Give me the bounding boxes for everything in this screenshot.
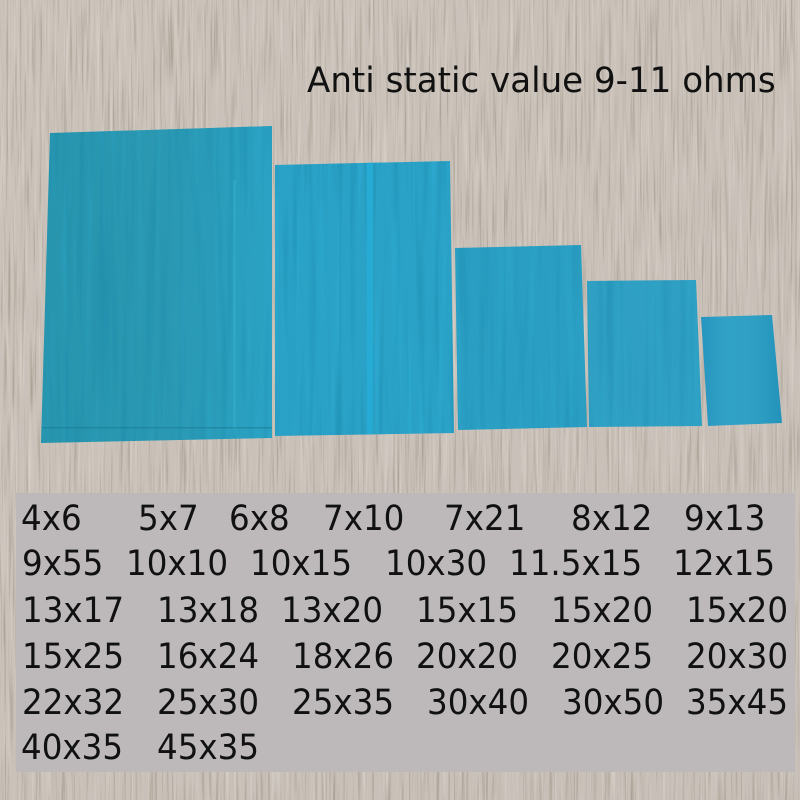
sizes list: 12x15	[673, 544, 775, 584]
sizes list: 9x13	[684, 499, 765, 539]
sizes list: 30x50	[562, 683, 664, 723]
bag 4	[587, 279, 703, 428]
sizes list: 13x17	[22, 591, 124, 631]
sizes list: 15x25	[22, 637, 124, 677]
sizes list: 16x24	[157, 637, 259, 677]
sizes list: 22x32	[22, 683, 124, 723]
sizes list: 20x30	[686, 637, 788, 677]
sizes list: 10x15	[250, 544, 352, 584]
sizes list: 10x30	[385, 544, 487, 584]
sizes list: 4x6	[21, 499, 82, 539]
sizes list: 15x20	[551, 591, 653, 631]
sizes list: 30x40	[427, 683, 529, 723]
sizes list: 7x10	[323, 499, 404, 539]
sizes list: 20x25	[551, 637, 653, 677]
sizes list: 45x35	[157, 728, 259, 768]
bag 5	[701, 314, 783, 427]
bag 3	[455, 244, 588, 431]
sizes list: 13x18	[157, 591, 259, 631]
sizes list: 25x35	[292, 683, 394, 723]
sizes list: 40x35	[21, 728, 123, 768]
sizes list: 6x8	[229, 499, 290, 539]
sizes list: 15x20	[686, 591, 788, 631]
sizes list: 15x15	[416, 591, 518, 631]
sizes list: 13x20	[281, 591, 383, 631]
sizes list: 25x30	[157, 683, 259, 723]
sizes list: 20x20	[416, 637, 518, 677]
sizes list: 11.5x15	[509, 544, 642, 584]
sizes list: 18x26	[292, 637, 394, 677]
sizes list: 5x7	[138, 499, 199, 539]
panel: sizes table	[16, 493, 795, 772]
sizes list: 8x12	[571, 499, 652, 539]
sizes list: 35x45	[686, 683, 788, 723]
sizes list	[21, 499, 788, 768]
bag 2	[275, 160, 455, 437]
sizes list: 10x10	[126, 544, 228, 584]
title: Anti static value 9-11 ohms	[307, 61, 776, 101]
bag 1	[40, 125, 273, 444]
sizes list: 9x55	[22, 544, 103, 584]
sizes list: 7x21	[444, 499, 525, 539]
